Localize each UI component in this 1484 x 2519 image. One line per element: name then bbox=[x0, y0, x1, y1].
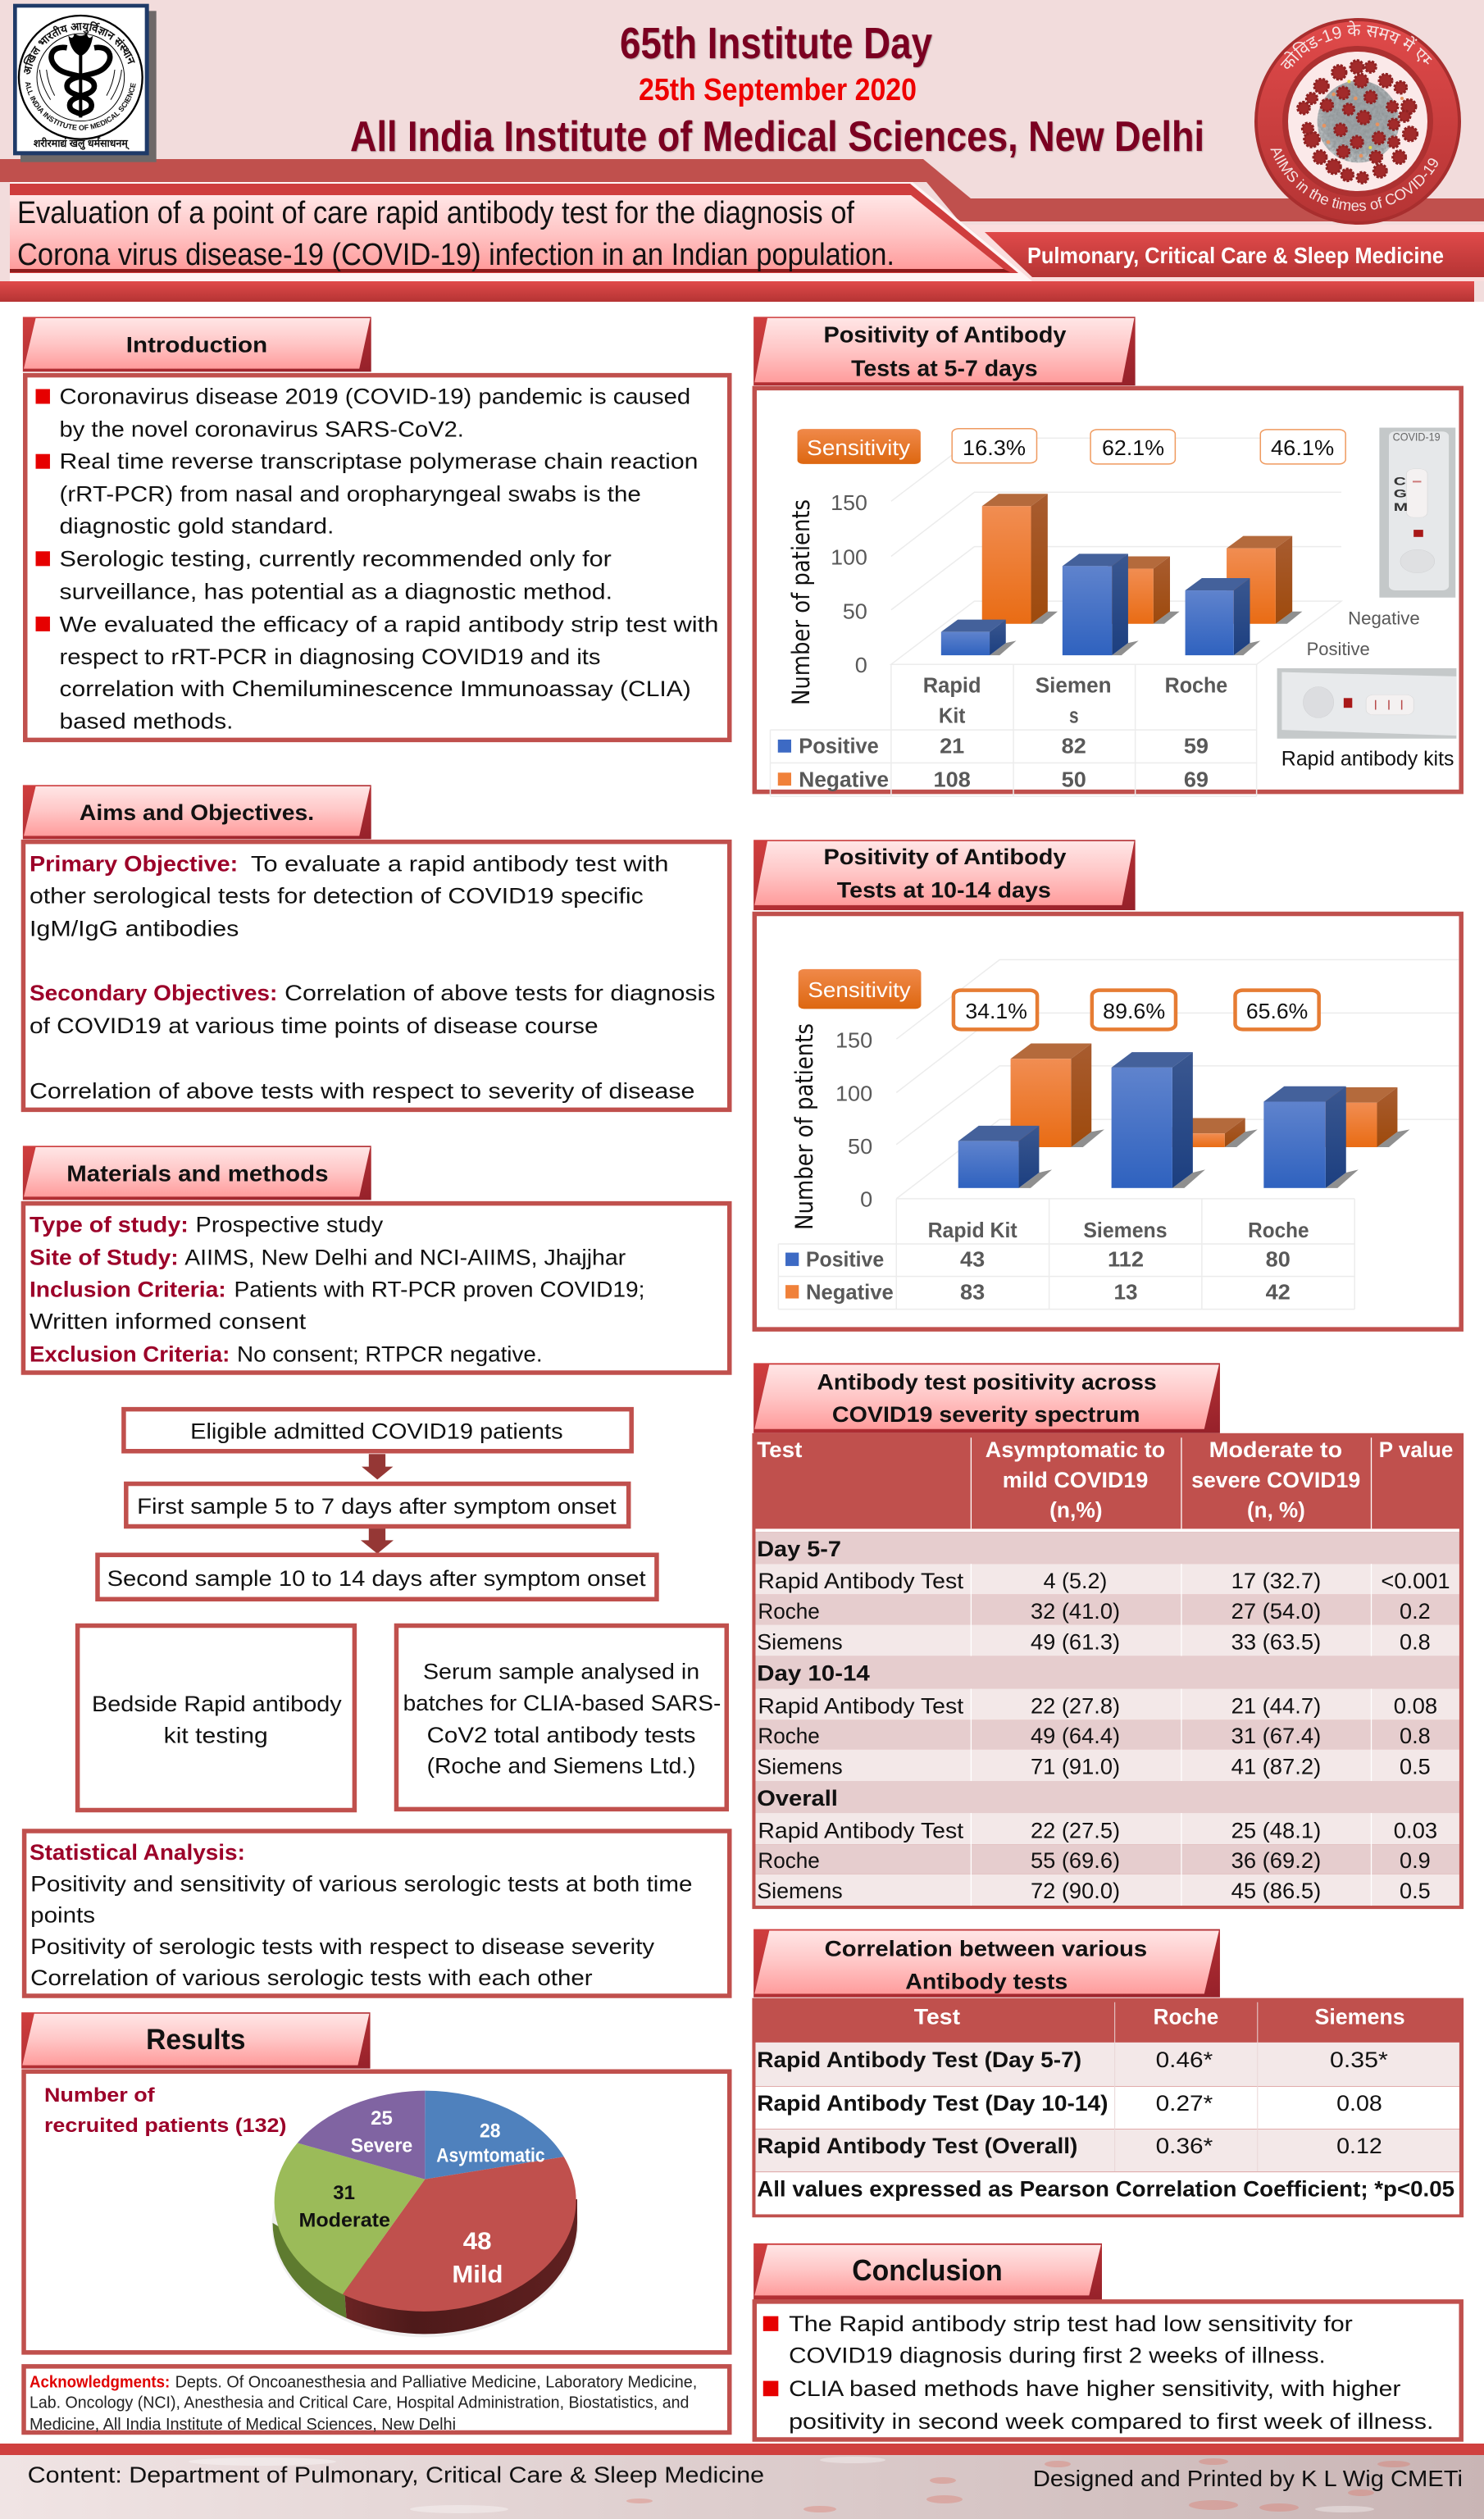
flow diagram bbox=[25, 1410, 730, 1996]
panel: positivity at 10-14 days bbox=[753, 840, 1461, 1329]
pie labels: 31 bbox=[333, 2182, 355, 2204]
introduction bullets: Serologic testing, currently recommended only for bbox=[60, 547, 612, 572]
chart data table 5-7 days: 69 bbox=[1184, 767, 1209, 791]
flow box: first sample: First sample 5 to 7 days after symptom onset bbox=[137, 1495, 617, 1519]
sensitivity values bbox=[952, 429, 1345, 464]
rows day 10-14: Siemens bbox=[757, 1755, 843, 1779]
heading: positivity 5-7 days: Positivity of Antibody bbox=[823, 323, 1067, 348]
flow box: eligible patients bbox=[124, 1410, 631, 1451]
sensitivity values: 16.3% bbox=[963, 435, 1026, 459]
panel: materials and methods bbox=[23, 1146, 730, 1373]
rows day 5-7: 49 (61.3) bbox=[1031, 1631, 1120, 1654]
kit labels: Positive bbox=[1307, 639, 1370, 659]
table header row bbox=[757, 1438, 1453, 1523]
heading: positivity 5-7 days: Tests at 5-7 days bbox=[851, 356, 1038, 381]
footer bbox=[0, 2444, 1484, 2519]
rows day 10-14: Day 10-14 bbox=[757, 1662, 870, 1686]
logo: AIIMS seal: अखिल भारतीय आयुर्विज्ञान संस्थान bbox=[23, 21, 135, 75]
chart data table 5-7 days: Negative bbox=[799, 767, 889, 791]
table: correlation bbox=[752, 1998, 1464, 2217]
results caption: Number of bbox=[44, 2084, 156, 2107]
panel: correlation table bbox=[752, 1929, 1464, 2217]
heading: correlation between antibody tests: Antibody tests bbox=[905, 1970, 1067, 1994]
y axis labels 10-14 days: 150 bbox=[835, 1028, 872, 1052]
heading: institute name: All India Institute of Medical Sciences, New Delhi bbox=[350, 113, 1204, 161]
flow box: bedside rapid antibody testing bbox=[78, 1625, 354, 1810]
heading: antibody test positivity across severity: Antibody test positivity across bbox=[817, 1371, 1157, 1395]
chart data table 10-14 days: Negative bbox=[806, 1280, 894, 1304]
table header row: Test bbox=[757, 1438, 802, 1462]
panel: statistical analysis: Statistical Analysis: bbox=[30, 1841, 245, 1865]
methods text: Written informed consent bbox=[30, 1310, 306, 1334]
flow box: first sample bbox=[126, 1483, 629, 1527]
rows day 10-14: 0.08 bbox=[1394, 1695, 1437, 1719]
methods text bbox=[30, 1213, 644, 1367]
methods text: AIIMS, New Delhi and NCI-AIIMS, Jhajjhar bbox=[184, 1246, 626, 1270]
y axis labels 10-14 days: 0 bbox=[860, 1187, 872, 1211]
heading: correlation between antibody tests bbox=[753, 1929, 1220, 1997]
chart data table 10-14 days: 112 bbox=[1108, 1247, 1144, 1271]
rows day 10-14: Roche bbox=[758, 1724, 820, 1748]
table: correlation: 0.36* bbox=[1156, 2134, 1213, 2158]
arrow: first to second sample bbox=[361, 1528, 394, 1554]
chart data table 10-14 days: Rapid Kit bbox=[928, 1218, 1017, 1242]
introduction bullets: respect to rRT-PCR in diagnosing COVID19 and its bbox=[60, 645, 600, 669]
sensitivity values: 46.1% bbox=[1271, 435, 1334, 459]
chart data table 5-7 days: Roche bbox=[1165, 673, 1227, 697]
table: correlation: Rapid Antibody Test (Overall) bbox=[757, 2134, 1077, 2158]
header background bbox=[0, 0, 1484, 302]
aims text: of COVID19 at various time points of disease course bbox=[30, 1014, 599, 1038]
aims text: Primary Objective: bbox=[30, 852, 238, 877]
table header row: (n,%) bbox=[1049, 1499, 1103, 1523]
rows day 5-7: 32 (41.0) bbox=[1031, 1600, 1120, 1624]
table: positivity by severity bbox=[752, 1433, 1464, 1909]
results caption: recruited patients (132) bbox=[44, 2115, 286, 2137]
flow box: serum sample CLIA testing bbox=[396, 1625, 726, 1809]
flow box: second sample bbox=[98, 1555, 657, 1599]
kit photo: negative: COVID-19 bbox=[1393, 430, 1441, 444]
chart data table 5-7 days: 108 bbox=[934, 767, 971, 791]
introduction bullets: based methods. bbox=[60, 709, 233, 734]
panel: aims and objectives bbox=[23, 785, 730, 1109]
flow box: serum sample CLIA testing: batches for CLIA-based SARS- bbox=[403, 1692, 721, 1716]
lower header band bbox=[0, 281, 1474, 302]
chart data table 5-7 days: 50 bbox=[1062, 767, 1086, 791]
chart data table 5-7 days: Positive bbox=[799, 734, 879, 758]
rows day 10-14: 71 (91.0) bbox=[1031, 1755, 1120, 1779]
table header row: (n, %) bbox=[1247, 1499, 1305, 1523]
rows overall bbox=[757, 1787, 1437, 1903]
chart data table 10-14 days: Siemens bbox=[1083, 1218, 1168, 1242]
aims text: To evaluate a rapid antibody test with bbox=[251, 852, 668, 877]
heading: antibody test positivity across severity bbox=[753, 1363, 1220, 1433]
table header row: mild COVID19 bbox=[1003, 1469, 1148, 1492]
chart data table 5-7 days: Siemen bbox=[1036, 673, 1112, 697]
study title text: Corona virus disease-19 (COVID-19) infection in an Indian population. bbox=[17, 238, 894, 272]
chart data table 10-14 days: 43 bbox=[960, 1247, 985, 1271]
rows day 10-14: 22 (27.8) bbox=[1031, 1695, 1120, 1719]
pie labels: Moderate bbox=[298, 2209, 390, 2231]
sensitivity values 10-14 days: 34.1% bbox=[965, 999, 1027, 1023]
title panel: study title bbox=[10, 182, 1033, 281]
rows day 5-7: 17 (32.7) bbox=[1231, 1569, 1321, 1593]
chart data table 5-7 days bbox=[770, 664, 1257, 796]
panel: introduction bbox=[23, 317, 730, 740]
heading: positivity 10-14 days: Tests at 10-14 days bbox=[837, 878, 1051, 903]
chart data table 10-14 days: 42 bbox=[1266, 1280, 1291, 1304]
pie labels: 48 bbox=[463, 2228, 492, 2255]
rows overall: 0.5 bbox=[1400, 1879, 1431, 1903]
heading: positivity 10-14 days bbox=[753, 840, 1136, 910]
introduction bullets: by the novel coronavirus SARS-CoV2. bbox=[60, 417, 464, 441]
chart data table 5-7 days: 82 bbox=[1062, 734, 1086, 758]
panel: severity table bbox=[752, 1363, 1464, 1909]
icon: AIIMS in the times of COVID-19 seal bbox=[1254, 18, 1461, 225]
logo: AIIMS seal bbox=[13, 3, 157, 162]
chart data table 5-7 days: Kit bbox=[939, 703, 965, 727]
chart data table 10-14 days: Roche bbox=[1248, 1218, 1309, 1242]
table: correlation: 0.35* bbox=[1330, 2048, 1388, 2072]
conclusion bullets: The Rapid antibody strip test had low sensitivity for bbox=[789, 2312, 1353, 2336]
flow box: bedside rapid antibody testing: kit testing bbox=[164, 1724, 268, 1748]
chart data table 5-7 days: Rapid bbox=[923, 673, 981, 697]
methods text: Site of Study: bbox=[30, 1246, 179, 1270]
title block bbox=[350, 19, 1204, 161]
table: correlation: 0.08 bbox=[1336, 2091, 1382, 2116]
chart data table 10-14 days: Positive bbox=[806, 1247, 884, 1271]
rows overall: 72 (90.0) bbox=[1031, 1879, 1120, 1903]
chart data table 5-7 days: 59 bbox=[1184, 734, 1209, 758]
table: correlation: 0.27* bbox=[1156, 2091, 1213, 2116]
heading: positivity 5-7 days bbox=[753, 317, 1136, 385]
y axis labels: 50 bbox=[843, 599, 867, 623]
rows day 5-7: 0.2 bbox=[1400, 1600, 1431, 1624]
rows day 5-7: 4 (5.2) bbox=[1044, 1569, 1107, 1593]
aims text: IgM/IgG antibodies bbox=[30, 917, 239, 941]
rows day 5-7: 33 (63.5) bbox=[1231, 1631, 1321, 1654]
header ribbon bbox=[0, 159, 1484, 221]
rows overall: 55 (69.6) bbox=[1031, 1849, 1120, 1873]
rows day 10-14: 21 (44.7) bbox=[1231, 1695, 1321, 1719]
heading: Conclusion bbox=[753, 2243, 1102, 2300]
aims text: other serological tests for detection of COVID19 specific bbox=[30, 884, 644, 909]
pie labels: Asymtomatic bbox=[436, 2144, 545, 2166]
rows day 10-14: Rapid Antibody Test bbox=[758, 1695, 964, 1719]
introduction bullets: diagnostic gold standard. bbox=[60, 514, 334, 539]
y axis labels bbox=[831, 490, 867, 677]
table: correlation: 0.46* bbox=[1156, 2048, 1213, 2072]
conclusion bullets: positivity in second week compared to first week of illness. bbox=[789, 2409, 1434, 2434]
heading: antibody test positivity across severity: COVID19 severity spectrum bbox=[832, 1403, 1140, 1427]
rows day 10-14: 31 (67.4) bbox=[1231, 1724, 1321, 1748]
logo: AIIMS seal: शरीरमाद्यं खलु धर्मसाधनम् bbox=[34, 137, 130, 150]
methods text: No consent; RTPCR negative. bbox=[237, 1342, 543, 1367]
rows overall: 0.9 bbox=[1400, 1849, 1431, 1873]
panel: statistical analysis: Positivity and sensitivity of various serologic tests at both time bbox=[30, 1872, 692, 1897]
rows day 5-7: <0.001 bbox=[1381, 1569, 1450, 1593]
heading: Results bbox=[21, 2012, 371, 2069]
study title text: Evaluation of a point of care rapid antibody test for the diagnosis of bbox=[17, 196, 854, 230]
chart data table 10-14 days: 83 bbox=[960, 1280, 985, 1304]
introduction bullets: We evaluated the efficacy of a rapid antibody strip test with bbox=[60, 613, 718, 637]
methods text: Patients with RT-PCR proven COVID19; bbox=[234, 1278, 644, 1302]
panel: acknowledgments bbox=[24, 2366, 730, 2434]
table: correlation: Roche bbox=[1154, 2004, 1218, 2029]
y axis labels 10-14 days bbox=[835, 1028, 872, 1211]
y axis labels: 150 bbox=[831, 490, 867, 515]
rows overall: 22 (27.5) bbox=[1031, 1820, 1120, 1843]
pie chart: disease severity bbox=[271, 2091, 578, 2337]
methods text: Prospective study bbox=[196, 1213, 384, 1237]
introduction bullets bbox=[36, 385, 718, 734]
rows overall: 0.03 bbox=[1394, 1820, 1437, 1843]
sensitivity label 10-14 days bbox=[799, 969, 921, 1009]
table: correlation: Siemens bbox=[1314, 2004, 1405, 2029]
kit labels bbox=[1281, 608, 1454, 770]
sensitivity label: Sensitivity bbox=[807, 435, 911, 459]
department banner bbox=[966, 225, 1484, 281]
sensitivity label bbox=[798, 429, 921, 464]
heading: positivity 10-14 days: Positivity of Antibody bbox=[823, 845, 1067, 870]
panel: statistical analysis: Positivity of serologic tests with respect to disease severity bbox=[30, 1935, 655, 1959]
axis title: chart 10-14 days: Number of patients bbox=[790, 1023, 818, 1230]
kit photo: negative: G bbox=[1394, 487, 1407, 500]
panel: positivity at 5-7 days bbox=[753, 317, 1461, 796]
flow box: serum sample CLIA testing: CoV2 total antibody tests bbox=[427, 1723, 696, 1747]
pie labels: 25 bbox=[371, 2107, 393, 2130]
kit photo: negative bbox=[1379, 428, 1455, 598]
rows day 10-14: 41 (87.2) bbox=[1231, 1755, 1321, 1779]
introduction bullets: surveillance, has potential as a diagnostic method. bbox=[60, 580, 612, 604]
heading: 65th Institute Day: 65th Institute Day bbox=[620, 19, 932, 68]
table: correlation: Rapid Antibody Test (Day 5-7) bbox=[757, 2048, 1081, 2072]
introduction bullets: correlation with Chemiluminescence Immunoassay (CLIA) bbox=[60, 677, 691, 701]
table: correlation: Rapid Antibody Test (Day 10-14) bbox=[757, 2091, 1108, 2116]
pie labels: 28 bbox=[480, 2120, 501, 2142]
panel: acknowledgments: Acknowledgments: bbox=[30, 2373, 170, 2391]
flow box: serum sample CLIA testing: (Roche and Siemens Ltd.) bbox=[427, 1754, 696, 1779]
rows day 5-7: Siemens bbox=[757, 1631, 843, 1654]
panel: statistical analysis: Correlation of various serologic tests with each other bbox=[30, 1966, 593, 1991]
introduction bullets: (rRT-PCR) from nasal and oropharyngeal swabs is the bbox=[60, 482, 641, 507]
panel: acknowledgments: Medicine, All India Institute of Medical Sciences, New Delhi bbox=[30, 2415, 456, 2434]
pie labels: Severe bbox=[351, 2135, 412, 2157]
sensitivity values 10-14 days: 89.6% bbox=[1103, 999, 1165, 1023]
kit photo: positive bbox=[1277, 668, 1456, 739]
aims text: Correlation of above tests for diagnosis bbox=[285, 981, 715, 1005]
rows day 10-14 bbox=[757, 1662, 1437, 1779]
flow box: second sample: Second sample 10 to 14 days after symptom onset bbox=[107, 1567, 646, 1592]
table header row: P value bbox=[1379, 1438, 1453, 1462]
heading: Materials and methods: Materials and methods bbox=[66, 1161, 328, 1187]
y axis labels 10-14 days: 100 bbox=[835, 1082, 872, 1105]
introduction bullets: Coronavirus disease 2019 (COVID-19) pandemic is caused bbox=[60, 385, 690, 409]
rows day 5-7: 27 (54.0) bbox=[1231, 1600, 1321, 1624]
sensitivity label 10-14 days: Sensitivity bbox=[808, 978, 911, 1002]
sensitivity values 10-14 days: 65.6% bbox=[1246, 999, 1308, 1023]
kit photo: negative: M bbox=[1394, 500, 1408, 513]
icon: AIIMS in the times of COVID-19 seal: AIIMS in the times of COVID-19 bbox=[1270, 149, 1438, 212]
rows overall: 36 (69.2) bbox=[1231, 1849, 1321, 1873]
table header row: Asymptomatic to bbox=[986, 1438, 1165, 1462]
heading: Materials and methods bbox=[23, 1146, 371, 1200]
aims text: Secondary Objectives: bbox=[30, 981, 277, 1005]
rows day 5-7 bbox=[757, 1537, 1450, 1654]
pie labels: Mild bbox=[452, 2261, 503, 2288]
sensitivity values 10-14 days bbox=[954, 991, 1319, 1029]
results caption bbox=[44, 2084, 286, 2137]
table header row: severe COVID19 bbox=[1191, 1469, 1360, 1492]
rows day 10-14: 0.5 bbox=[1400, 1755, 1431, 1779]
kit photo: negative: C bbox=[1394, 475, 1406, 488]
heading: Introduction: Introduction bbox=[126, 333, 267, 358]
study title text bbox=[17, 196, 894, 272]
kit labels: Negative bbox=[1348, 608, 1420, 628]
rows day 5-7: Roche bbox=[758, 1600, 820, 1624]
y axis labels 10-14 days: 50 bbox=[848, 1135, 872, 1159]
rows day 5-7: 0.8 bbox=[1400, 1631, 1431, 1654]
flow box: bedside rapid antibody testing: Bedside Rapid antibody bbox=[92, 1692, 342, 1717]
table header row: Moderate to bbox=[1209, 1438, 1342, 1462]
heading: date: 25th September 2020 bbox=[639, 73, 917, 107]
table: correlation: Test bbox=[914, 2004, 960, 2029]
arrow: eligible to first sample bbox=[362, 1454, 393, 1479]
panel: statistical analysis bbox=[25, 1831, 730, 1996]
heading: Results: Results bbox=[146, 2025, 245, 2056]
panel: results bbox=[21, 2012, 730, 2353]
y axis labels: 100 bbox=[831, 545, 867, 569]
rows day 10-14: 49 (64.4) bbox=[1031, 1724, 1120, 1748]
sensitivity values: 62.1% bbox=[1102, 435, 1164, 459]
panel: conclusion bbox=[753, 2243, 1461, 2439]
methods text: Type of study: bbox=[30, 1213, 189, 1237]
chart data table 10-14 days: 80 bbox=[1266, 1247, 1291, 1271]
panel: acknowledgments: Lab. Oncology (NCI), Anesthesia and Critical Care, Hospital Administration, Biostatistics, and bbox=[30, 2394, 689, 2412]
conclusion bullets: CLIA based methods have higher sensitivity, with higher bbox=[789, 2376, 1400, 2401]
aims text: Correlation of above tests with respect to severity of disease bbox=[30, 1078, 694, 1104]
pie labels bbox=[298, 2107, 545, 2288]
aims text bbox=[30, 852, 715, 1104]
rows day 10-14: 0.8 bbox=[1400, 1724, 1431, 1748]
methods text: Inclusion Criteria: bbox=[30, 1278, 226, 1302]
3D bar chart 5-7 days bbox=[891, 438, 1341, 664]
panel: acknowledgments: Depts. Of Oncoanesthesia and Palliative Medicine, Laboratory Medicine, bbox=[175, 2373, 697, 2391]
rows overall: 25 (48.1) bbox=[1231, 1820, 1321, 1843]
rows overall: 45 (86.5) bbox=[1231, 1879, 1321, 1903]
introduction bullets: Real time reverse transcriptase polymerase chain reaction bbox=[60, 449, 698, 474]
heading: Aims and Objectives: Aims and Objectives. bbox=[80, 800, 314, 825]
rows overall: Rapid Antibody Test bbox=[758, 1820, 964, 1843]
department banner: Pulmonary, Critical Care & Sleep Medicine bbox=[1027, 243, 1444, 268]
chart data table 5-7 days: s bbox=[1069, 703, 1079, 727]
heading: Conclusion: Conclusion bbox=[852, 2253, 1003, 2287]
axis title: chart 5-7 days: Number of patients bbox=[787, 499, 815, 705]
rows overall: Overall bbox=[757, 1787, 838, 1811]
rows day 5-7: Day 5-7 bbox=[757, 1537, 841, 1561]
chart data table 5-7 days: 21 bbox=[940, 734, 964, 758]
table: correlation: 0.12 bbox=[1336, 2134, 1382, 2158]
rows overall: Siemens bbox=[757, 1879, 843, 1903]
heading: Introduction bbox=[23, 317, 371, 371]
methods text: Exclusion Criteria: bbox=[30, 1342, 230, 1367]
heading: Aims and Objectives bbox=[23, 785, 371, 839]
heading: correlation between antibody tests: Correlation between various bbox=[825, 1936, 1147, 1961]
3D bar chart 10-14 days bbox=[896, 959, 1459, 1199]
panel: statistical analysis: points bbox=[30, 1903, 95, 1928]
rows overall: Roche bbox=[758, 1849, 820, 1873]
rows day 5-7: Rapid Antibody Test bbox=[758, 1569, 964, 1593]
chart data table 10-14 days bbox=[778, 1199, 1354, 1310]
flow box: eligible patients: Eligible admitted COVID19 patients bbox=[190, 1419, 563, 1444]
chart data table 10-14 days: 13 bbox=[1114, 1280, 1138, 1304]
y axis labels: 0 bbox=[855, 653, 867, 677]
footer: content credit: Content: Department of Pulmonary, Critical Care & Sleep Medicine bbox=[28, 2462, 764, 2488]
conclusion bullets: COVID19 diagnosis during first 2 weeks of illness. bbox=[789, 2344, 1326, 2368]
flow box: serum sample CLIA testing: Serum sample analysed in bbox=[423, 1660, 699, 1684]
conclusion bullets bbox=[763, 2312, 1434, 2434]
